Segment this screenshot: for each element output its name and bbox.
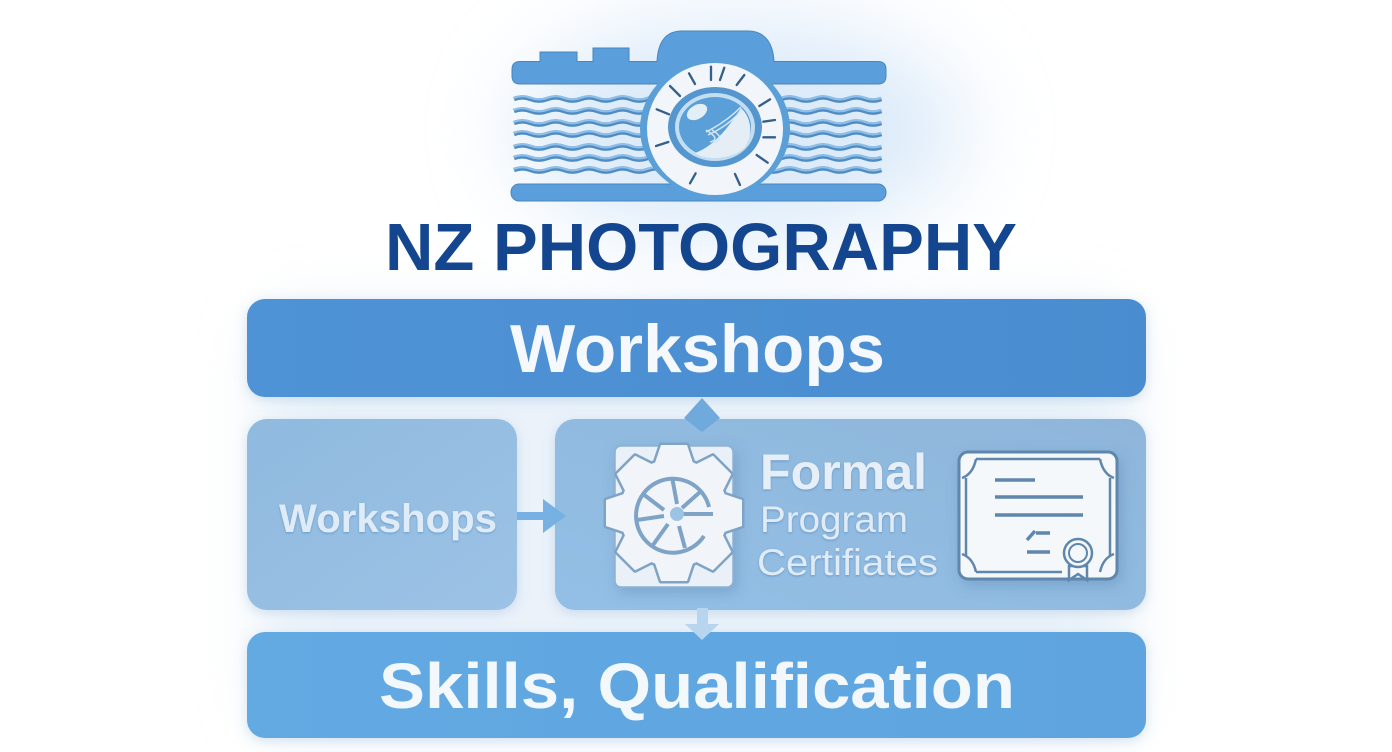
icon: medal	[1064, 539, 1092, 580]
arrow: diamond up to workshops	[684, 398, 720, 432]
arrow: left panel to right panel	[517, 499, 566, 533]
panel: top workshops	[247, 299, 1146, 397]
background glow behind panels	[260, 310, 1130, 730]
gear aperture dial	[636, 477, 713, 553]
panel: left workshops	[247, 419, 517, 610]
panel: skills qualification	[247, 632, 1146, 738]
icon: certificate	[959, 452, 1117, 580]
gear fill	[606, 445, 742, 581]
heading: workshops: Workshops	[510, 311, 885, 387]
background glow behind logo	[515, 20, 965, 240]
lens ticks	[656, 67, 775, 185]
camera waves	[514, 96, 881, 172]
icon: camera logo	[511, 31, 886, 201]
text: program: Program	[760, 499, 908, 540]
camera body top	[512, 31, 886, 84]
text: formal: Formal	[760, 444, 927, 500]
panel: formal program certificates	[555, 419, 1146, 610]
gear outline	[606, 445, 742, 581]
title: NZ PHOTOGRAPHY	[385, 210, 1017, 285]
lens	[640, 60, 790, 198]
icon: gear on document	[606, 445, 742, 587]
camera body bottom bar	[511, 184, 886, 201]
text: certificates: Certifiates	[757, 542, 938, 583]
arrow: down to skills	[685, 608, 719, 640]
heading: skills qualification: Skills, Qualification	[379, 650, 1015, 722]
label: workshops: Workshops	[279, 497, 497, 541]
